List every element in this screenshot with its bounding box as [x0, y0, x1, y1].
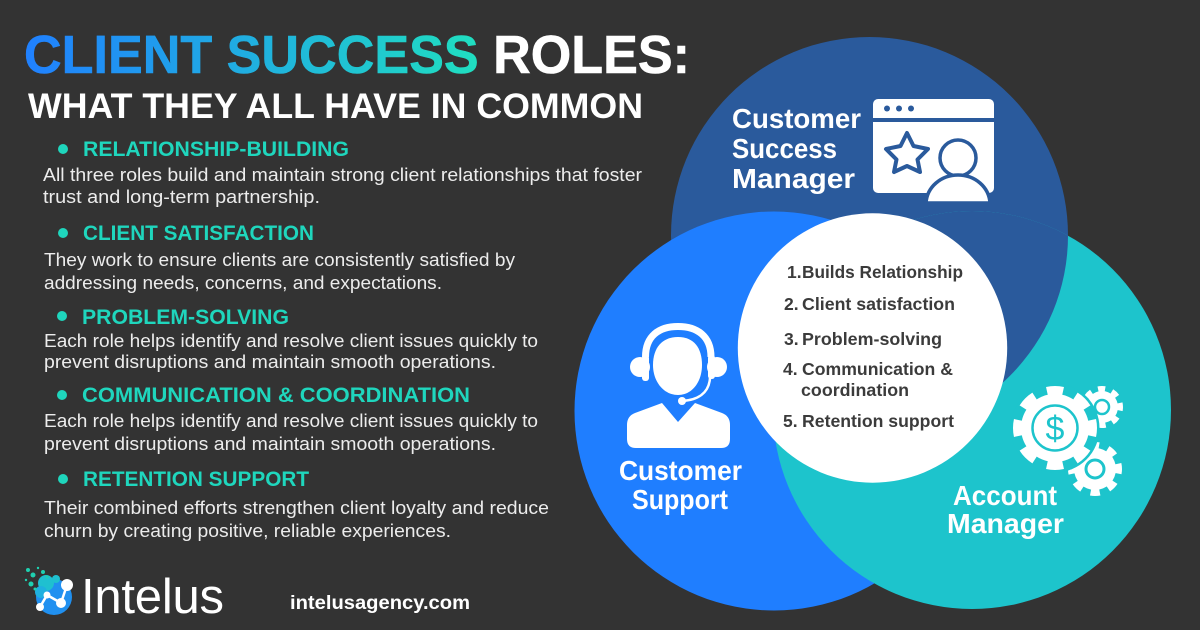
logo mark: [25, 567, 73, 615]
numbered list: 2.: [784, 294, 799, 314]
overlap: success manager over account manager: [914, 211, 1068, 383]
section: client satisfaction: CLIENT SATISFACTION: [83, 222, 314, 245]
section: relationship-building: All three roles build and maintain strong client relationships that foster: [43, 164, 642, 185]
logo wordmark: Intelus: [81, 570, 224, 624]
section: communication and coordination: Each role helps identify and resolve client issues quickly to: [44, 410, 538, 431]
section: client satisfaction: addressing needs, concerns, and expectations.: [44, 272, 442, 293]
section: communication and coordination: [44, 384, 538, 454]
numbered list: 1.: [787, 262, 802, 282]
label: customer support: Support: [632, 484, 728, 515]
small gear top: [1084, 389, 1120, 425]
section: retention support: Their combined efforts strengthen client loyalty and reduce: [44, 497, 549, 518]
label: customer success manager: Customer: [732, 103, 861, 134]
numbered list: 4.: [783, 359, 798, 379]
section: problem-solving: PROBLEM-SOLVING: [82, 306, 289, 329]
label: account manager: Account: [953, 480, 1057, 511]
section: relationship-building: RELATIONSHIP-BUILDING: [83, 138, 349, 161]
circle: customer success manager: [671, 37, 1068, 434]
section: retention support: churn by creating positive, reliable experiences.: [44, 520, 451, 541]
numbered list: 3.: [784, 329, 799, 349]
label: customer success manager: Success: [732, 133, 837, 164]
title: [24, 25, 690, 126]
venn diagram: [574, 37, 1171, 610]
numbered list: [783, 262, 963, 431]
numbered list: Builds Relationship: [802, 262, 963, 282]
icon: headset agent: [627, 326, 730, 448]
section: client satisfaction: [44, 222, 516, 293]
numbered list: Communication &: [802, 359, 953, 379]
section: relationship-building: [43, 138, 642, 207]
section: relationship-building: trust and long-term partnership.: [43, 186, 320, 207]
section: retention support: RETENTION SUPPORT: [83, 468, 309, 491]
title: CLIENT SUCCESS ROLES:: [24, 25, 690, 85]
numbered list: Problem-solving: [802, 329, 942, 349]
circle: customer support: [574, 212, 974, 610]
section: problem-solving: Each role helps identify and resolve client issues quickly to: [44, 330, 538, 351]
numbered list: Client satisfaction: [802, 294, 955, 314]
small gear bottom: [1072, 446, 1118, 492]
label: customer support: Customer: [619, 455, 742, 486]
icon: browser window with star and person: [873, 99, 994, 208]
section: problem-solving: prevent disruptions and maintain smooth operations.: [44, 351, 496, 372]
large gear: $: [1046, 410, 1065, 448]
numbered list: coordination: [801, 380, 909, 400]
section: retention support: [44, 468, 549, 541]
circle: account manager: [773, 211, 1171, 609]
section: client satisfaction: They work to ensure clients are consistently satisfied by: [44, 249, 516, 270]
section: communication and coordination: COMMUNICATION & COORDINATION: [82, 384, 470, 407]
numbered list: Retention support: [802, 411, 954, 431]
label: account manager: Manager: [947, 508, 1064, 539]
logo: Intelus: [25, 567, 224, 624]
centre white circle: [738, 213, 1007, 483]
website url: intelusagency.com: [290, 593, 470, 614]
subtitle: WHAT THEY ALL HAVE IN COMMON: [28, 87, 643, 126]
label: customer success manager: Manager: [732, 163, 855, 194]
numbered list: 5.: [783, 411, 798, 431]
section: problem-solving: [44, 306, 538, 372]
section: communication and coordination: prevent disruptions and maintain smooth operations.: [44, 433, 496, 454]
icon: gears with dollar: [1010, 384, 1120, 492]
